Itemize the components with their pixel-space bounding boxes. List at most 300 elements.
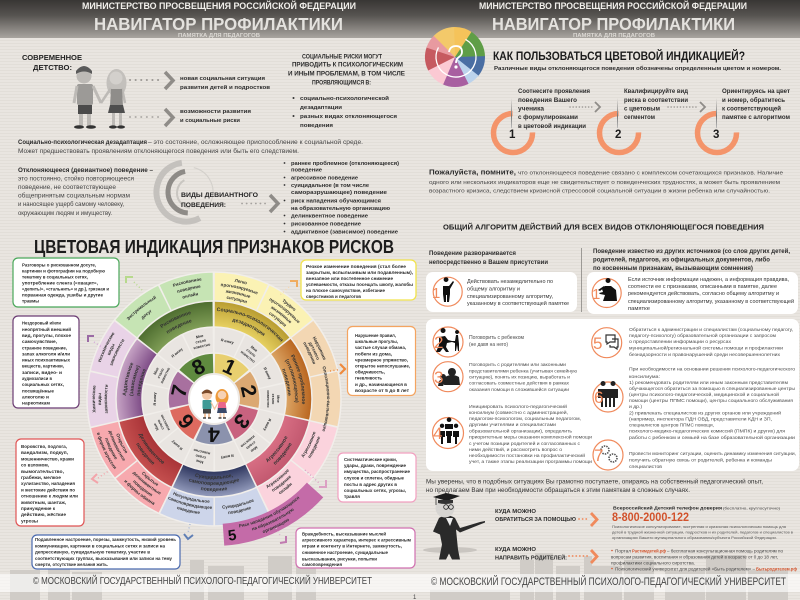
callout: pink: имущества, распространение	[344, 469, 410, 474]
text: new social situation	[180, 76, 271, 91]
text: we are confident	[426, 478, 763, 494]
arrow: step 1 to 2	[570, 102, 600, 112]
callout: blue: коммуникации, картинки в социальных сетях и записи на	[35, 544, 165, 548]
step 2: talk to child: (не давя на него)	[469, 342, 508, 348]
step 6: referrals: психолого-медико-педагогических комиссий (ПМПК) и других) для	[629, 428, 785, 434]
text: types of deviant behaviour label	[181, 192, 258, 209]
callout: magenta: высказывания, рисунки, попытки	[302, 556, 377, 562]
wheel band labels: Раннее проблемное	[290, 354, 305, 404]
wheel inner cell labels: стало	[271, 394, 275, 405]
callout: yellow: сверстников и педагогов	[306, 294, 361, 299]
text: behaviour in your presence: непосредственно в Вашем присутствии	[429, 260, 548, 266]
wheel band labels: Аддиктивное	[122, 362, 134, 396]
callout: orange: гневливость	[355, 376, 382, 381]
step 2: talk to child: Поговорить с ребенком	[469, 335, 524, 341]
card: step 1 indirect: рекомендуется действовать, согласно общему алгоритму и	[628, 290, 779, 297]
card: step 1 indirect: Если источник информации надежен, а информация правдива,	[628, 277, 789, 283]
step 5: contact specialists: 5	[593, 334, 602, 353]
wheel inner cell labels: стало	[156, 418, 165, 430]
list: types of deviant behaviour	[284, 160, 399, 236]
step 6: referrals: 2) привлекать специалистов из других органов или учреждений	[629, 410, 781, 416]
wheel numbers: 6	[174, 409, 199, 433]
heading: modern childhood: СОВРЕМЕННОЕ	[22, 53, 82, 62]
helpline: Психологическое консультирование, экстренная и кризисная психологическая помощь для	[612, 524, 786, 529]
callout: red: принуждение к	[21, 506, 56, 511]
card: step 1 indirect: специализированному алгоритму, указанному в соответствующей	[628, 298, 794, 305]
callout: red: отношению к людям или	[21, 494, 78, 499]
step 4: consilium: образовательной организации), определить	[469, 428, 572, 435]
list: types of deviant behaviour: риск нападения обучающимся	[291, 198, 381, 204]
callout: purple	[13, 316, 79, 408]
wheel band labels: Делинквентное	[138, 434, 164, 464]
text: deviant behaviour definition: окружающим людям и имуществу.	[18, 210, 112, 217]
step 3: talk to parents	[433, 362, 577, 393]
wheel band labels: самоповреждающее	[189, 478, 239, 486]
wheel behaviour band	[95, 280, 333, 518]
step 4: consilium: консилиум (совместно с администрацией,	[469, 409, 568, 416]
wheel outer labels: поведения	[132, 479, 154, 498]
wheel banner: segment 5: на образовательную	[250, 506, 296, 533]
card: step 1 indirect: 1	[592, 286, 600, 303]
step 4: consilium: учет, а также этапы реализации программы помощи	[469, 460, 592, 465]
callout: red: угрозы	[21, 518, 38, 523]
wheel band labels: Рискованное	[160, 312, 191, 328]
step 5: contact specialists: о предоставлении информации о ресурсах	[629, 339, 732, 345]
text: behaviour known from other sources	[581, 248, 790, 312]
callout: yellow: успеваемости, отказы посещать школу, жалобы	[306, 281, 413, 287]
wheel inner cell labels: Я вижу	[262, 418, 272, 432]
wheel outer labels: Агрессивное	[266, 469, 289, 488]
header band right: НАВИГАТОР ПРОФИЛАКТИКИ	[492, 14, 735, 34]
callout: magenta: играм и контенту в Интернете, замкнутость,	[302, 544, 402, 549]
wheel centre children	[202, 389, 228, 418]
wheel outer labels: виды	[97, 393, 102, 405]
callout: magenta	[296, 528, 415, 568]
callout: orange	[348, 326, 416, 396]
wheel band labels: дезадаптация	[232, 318, 265, 336]
callout: orange: побеги из дома,	[355, 350, 392, 356]
step 3: talk to parents: представителями ребенка (учитывая семейную	[469, 368, 577, 374]
callout: orange: частые случаи обмана,	[355, 344, 406, 350]
wheel outer labels: делинквентные	[131, 470, 163, 497]
text: where to seek help	[495, 509, 576, 523]
text: deviant behaviour definition: и наносящее ущерб самому человеку,	[18, 201, 124, 208]
text: disadaptation definition	[18, 139, 363, 155]
text: please remember: Пожалуйста, помните,	[429, 168, 516, 176]
wheel inner cell labels: известно	[192, 448, 211, 456]
arrow: orange	[330, 364, 345, 374]
illustration: teacher	[423, 493, 485, 560]
text: social risks heading	[288, 54, 405, 86]
arrow: to list of types	[242, 195, 278, 212]
callout: purple: странное поведение,	[22, 345, 67, 350]
callout: yellow: внезапное или постепенное снижение	[306, 276, 393, 281]
list: types of deviant behaviour: поведение	[291, 168, 322, 174]
text: opportunities and risks: и социальные риски	[180, 118, 240, 124]
wheel numbers: 8	[188, 355, 209, 380]
parent resources: профилактики социального сиротства.	[611, 560, 695, 565]
step 5: contact specialists: педагогу-психологу) образовательной организации с запросом	[629, 332, 777, 339]
text: social risks heading: ПРОЯВЛЯЮЩИМСЯ В:	[312, 80, 371, 86]
callout: purple: алкоголю и	[22, 394, 49, 400]
wheel outer labels: Рискованное	[172, 276, 203, 288]
wheel band labels: поведение	[137, 369, 146, 396]
step 6: referrals: (например, инспектора ПДН ОВД, представители КДН и ЗП,	[629, 416, 772, 422]
text: new social situation: развития детей и подростков	[180, 84, 271, 91]
wheel inner cell labels: известно	[239, 434, 256, 449]
wheel number ring	[164, 349, 264, 449]
wheel inner cell labels: Мне	[250, 445, 258, 453]
wheel inner cell labels: Я вижу	[153, 391, 157, 406]
step 7: monitoring: 7	[594, 446, 603, 465]
parent resources	[611, 548, 797, 571]
wheel inner cell labels: Я вижу	[171, 347, 184, 359]
step 6: referrals: При необходимости на основании решения психолого-педагогического	[629, 366, 795, 372]
text: we are confident: Мы уверены, что в подобных ситуациях Вы грамотно поступаете, опираясь на собственный педагогический опыт,	[426, 478, 763, 486]
step 5: contact specialists: Обратиться к администрации и специалистам (социальному педагогу,	[629, 327, 793, 333]
callout: purple: посвящённые	[22, 388, 54, 393]
text: please remember: одного или нескольких индикаторов еще не свидетельствует о поведенческих трудностях, а может быть проявлением	[429, 180, 780, 186]
step 7: monitoring: получить обратную связь от родителей, ребенка и команды	[629, 457, 773, 464]
arrow: blue	[184, 524, 193, 539]
header band right	[400, 0, 800, 39]
wheel band labels: поведение	[166, 320, 192, 334]
text: new social situation: новая социальная ситуация	[180, 76, 265, 82]
helpline: организациях Вашего муниципального образования/субъекта Российской Федерации.	[612, 535, 777, 540]
text: please remember: возрастного кризиса, следствием кризисной стрессовой социальной ситуации в жизни ребенка или случайностью.	[429, 188, 770, 194]
wheel numbers: 7	[167, 383, 192, 399]
wheel seen/known ring	[155, 340, 273, 458]
text: opportunities and risks: возможности развития	[180, 109, 251, 115]
callout: green: травмы	[22, 299, 39, 304]
callout: green: порванная одежда, ушибы и другие	[22, 292, 103, 298]
card: step 1 direct: общему алгоритму и	[467, 286, 520, 292]
wheel inner cell labels: стало	[157, 367, 165, 379]
text: opportunities and risks	[180, 109, 251, 124]
arrow: to opportunities and risks	[130, 109, 173, 126]
card: step 1 direct	[426, 272, 577, 312]
list: types of deviant behaviour: на образовательную организацию	[291, 205, 391, 212]
callout: pink: удары, драки, повреждение	[344, 463, 406, 468]
step 3: talk to parents: ситуацию), понять их позицию, выработать и	[469, 374, 570, 380]
callout: green: Разговоры о рискованном досуге,	[22, 263, 96, 268]
list: social risks: дезадаптации	[300, 105, 342, 111]
wheel outer labels: делинквентное	[107, 429, 127, 463]
callout: magenta: сниженное настроение, суицидальные	[302, 550, 388, 555]
helpline: Всероссийский Детский телефон доверия	[613, 504, 722, 512]
step 2: сегментом	[624, 115, 656, 121]
wheel numbers	[167, 355, 261, 446]
step 6: referrals: работы с ребенком и семьей на базе образовательной организации	[629, 434, 795, 441]
wheel inner cell labels: Мне	[196, 459, 204, 464]
wheel band labels: Агрессивное	[266, 436, 288, 462]
footer band: © МОСКОВСКИЙ ГОСУДАРСТВЕННЫЙ ПСИХОЛОГО-ПЕДАГОГИЧЕСКИЙ УНИВЕРСИТЕТ	[33, 574, 372, 587]
step 1	[494, 89, 590, 152]
text: types of deviant behaviour label: ВИДЫ ДЕВИАНТНОГО	[181, 192, 258, 199]
callout: red: грабежи, мелкое	[21, 474, 61, 480]
wheel numbers: 4	[208, 422, 220, 446]
wheel outer labels: Несуицидальное	[173, 492, 210, 503]
text: behaviour in your presence	[429, 251, 548, 266]
parent resources: Психологический университет для родителей «Быть родителем» –	[615, 566, 756, 571]
wheel outer labels: поведение	[177, 506, 200, 514]
text: deviant behaviour definition	[18, 168, 154, 217]
list: social risks	[292, 95, 397, 129]
callout: magenta: Враждебность, высказывание мыслей	[302, 530, 386, 536]
callout: green: «депить!», «стальнить» и др.), грязная и	[22, 287, 109, 292]
callout: pink: слухов и сплетен, обидные	[344, 474, 404, 480]
text: we are confident: но предлагаем Вам при необходимости обращаться к этим памяткам в сложных случаях.	[426, 486, 690, 494]
callout: purple: вид, прогулы, плохое	[22, 333, 71, 338]
callout: red	[16, 439, 84, 526]
step 2	[600, 88, 688, 152]
list: types of deviant behaviour: суицидальное (в том числе	[291, 183, 369, 189]
card: steps 2-7	[426, 319, 799, 471]
illustration: grey children	[74, 66, 126, 129]
card: step 1 direct: Действовать незамедлительно по	[467, 278, 553, 285]
step 4: consilium: Инициировать психолого-педагогический	[469, 403, 567, 410]
callout: pink: социальных сетях, угрозы,	[344, 488, 406, 493]
wheel banner: segment 5	[222, 482, 324, 546]
text: where to refer parents: КУДА МОЖНО	[495, 547, 536, 553]
callout: blue	[32, 535, 180, 569]
callout: red: мошенничество, кражи	[21, 456, 74, 461]
callout: orange: обидчивость,	[355, 369, 385, 375]
text: social risks heading: ПРИВОДИТЬ К ПСИХОЛОГИЧЕСКИМ	[292, 62, 403, 68]
icon: concentric arcs	[146, 152, 226, 232]
parent resources: Растимдетей.рф	[632, 548, 666, 553]
wheel outer labels: онлайн	[279, 482, 292, 494]
step 6: referrals: специалистов центров ППМС помощи,	[629, 422, 714, 428]
wheel outer labels: жизненные	[270, 306, 292, 324]
wheel outer labels: зависимости	[103, 384, 109, 414]
callout: orange: открытое непослушание,	[355, 364, 410, 368]
step 1: поведения Вашего	[518, 98, 577, 104]
wheel outer labels: Нехимические	[96, 330, 116, 363]
header band left	[0, 0, 400, 39]
heading: modern childhood	[22, 53, 82, 72]
callout: purple: иных психоактивных	[22, 358, 70, 363]
icon: colour wheel with question mark	[429, 30, 483, 84]
wheel outer labels: детского	[308, 342, 319, 360]
arrow: step 2 to 3	[668, 102, 705, 112]
text: please remember: что отклоняющееся поведение связано с комплексом сочетающихся признаков. Наличие	[518, 170, 784, 176]
subheading: Различные виды отклоняющегося поведения обозначены определенным цветом и номером.	[494, 65, 781, 72]
wheel inner cell labels: Я вижу	[220, 338, 235, 345]
callout: yellow: Резкое изменение поведения (стал более	[306, 263, 406, 269]
wheel inner cell labels: Мне	[153, 367, 160, 376]
wheel outer labels: поведение	[228, 506, 251, 514]
callout: pink: травля	[344, 494, 360, 499]
wheel outer labels: прогнозируемые	[269, 298, 300, 324]
callout: pink: посты в адрес других в	[344, 482, 397, 487]
step 6: referrals: (центры психолого-педагогической, медицинской и социальной	[629, 391, 779, 398]
wheel inner cell labels: Я вижу	[262, 367, 272, 381]
callout: purple: самочувствие,	[22, 339, 57, 344]
wheel inner cell labels: Мне	[196, 334, 204, 339]
callout: red: действию, жёсткие	[21, 511, 66, 517]
wheel outer labels: поведение	[103, 437, 119, 461]
wheel band labels: (отклоняющееся)	[284, 359, 299, 402]
card: step 1 direct: указанному в соответствующей памятке	[467, 300, 569, 307]
text: behaviour known from other sources: родителей, педагогов, из официальных документов, либо	[593, 256, 770, 264]
callout: orange: Нарушение правил,	[355, 333, 396, 338]
step 3: talk to parents: согласовать совместные действия в рамках	[469, 380, 570, 386]
footer band	[0, 574, 800, 592]
wheel inner cell labels: Мне	[276, 395, 280, 403]
list: social risks: разных видах отклоняющегося	[300, 114, 397, 120]
text: behaviour known from other sources: по косвенным признакам, вызывающим сомнения)	[593, 266, 753, 272]
text: where to seek help: ОБРАТИТЬСЯ ЗА ПОМОЩЬЮ	[495, 517, 576, 523]
arrow: yellow-orange	[280, 281, 297, 295]
card: step 1 direct: 1	[432, 285, 440, 302]
wheel outer labels: в форме агрессии	[94, 431, 118, 471]
wheel outer labels: Химические	[91, 385, 97, 413]
wheel band labels	[122, 308, 305, 492]
arrow: green	[126, 277, 142, 290]
step 5: contact specialists: муниципальной/региональной системы помощи и профилактики	[629, 344, 783, 352]
colour wheel	[86, 271, 342, 546]
step 6: referrals	[593, 366, 795, 441]
text: disadaptation definition: – это состояние, осложняющее приспособление к социальной среде.	[148, 139, 363, 146]
step 3: Ориентируясь на цвет	[722, 89, 790, 95]
wheel band labels: поведение	[200, 487, 228, 492]
callout: blue: Подавленное настроение, порезы, замкнутость, низкий уровень	[35, 536, 176, 542]
wheel outer labels: ситуации	[226, 296, 247, 304]
step 3: к соответствующей	[722, 106, 781, 112]
step 4: consilium	[432, 403, 592, 465]
callout: green: тематику в социальных сетях,	[22, 275, 88, 280]
wheel outer ring	[56, 241, 372, 557]
arrow: purple	[88, 336, 103, 348]
callout: purple: Нездоровый и/или	[22, 320, 61, 326]
wheel outer labels: поведение	[176, 283, 202, 294]
step 5: contact specialists: безнадзорности и правонарушений среди несовершеннолетних	[629, 351, 781, 358]
wheel inner cell labels: известно	[193, 342, 211, 350]
wheel inner cell labels: стало	[245, 440, 256, 450]
callout: green: употребление сленга («хвацит»,	[22, 280, 98, 286]
wheel band labels: поведение	[136, 442, 154, 464]
step 1: в цветовой индикации	[518, 123, 586, 130]
wheel numbers: 2	[236, 383, 261, 399]
list: types of deviant behaviour: саморазрушающее) поведение	[291, 190, 387, 196]
callout: blue: соответствующих группах, высказывания или записи на тему	[35, 556, 172, 561]
text: please remember	[429, 168, 784, 194]
step 4: consilium: ними действий, и рассмотреть вопрос о	[469, 446, 562, 453]
wheel inner cell labels: известно	[160, 413, 171, 431]
text: behaviour in your presence: Поведение разворачивается	[429, 251, 516, 257]
callout: purple: неопрятный внешний	[22, 326, 71, 332]
step 2: talk to child: 2	[434, 333, 443, 352]
wheel outer labels: и формы обмана	[122, 478, 157, 507]
step 6: referrals: 6	[594, 388, 603, 407]
wheel inner cell labels: стало	[195, 338, 207, 345]
card: step 1 direct: специализированному алгоритму,	[467, 294, 553, 300]
header band right: ПАМЯТКА ДЛЯ ПЕДАГОГОВ	[573, 33, 655, 39]
callout: purple: запах алкоголя и/или	[22, 351, 70, 356]
wheel inner cell labels: стало	[194, 453, 207, 460]
step 1: 1	[509, 129, 516, 141]
list: types of deviant behaviour: делинквентное поведение	[291, 214, 368, 220]
wheel inner cell labels: известно	[240, 350, 256, 364]
step 4: consilium: другими учителями и специалистами	[469, 423, 556, 428]
callout: red: Воровство, подлога,	[21, 444, 67, 449]
text: deviant behaviour definition: общепринятым социальным нормам	[18, 192, 130, 200]
callout: red: вымогательство,	[21, 469, 64, 474]
card: step 1 indirect: памятке	[628, 306, 650, 312]
step 7: monitoring	[593, 440, 796, 470]
wheel outer labels: Легко	[234, 278, 247, 284]
step 3: памятке с алгоритмом	[722, 115, 791, 121]
wheel outer labels: Суицидальное	[222, 500, 254, 510]
wheel outer labels: поведение	[308, 436, 320, 458]
wheel numbers: 3	[229, 409, 254, 433]
text: deviant behaviour definition: это постоянно, стойко повторяющееся	[18, 176, 134, 182]
heading: general algorithm: ОБЩИЙ АЛГОРИТМ ДЕЙСТВИЙ ДЛЯ ВСЕХ ВИДОВ ОТКЛОНЯЮЩЕГОСЯ ПОВЕДЕНИЯ	[443, 222, 764, 232]
wheel outer labels: досуг	[140, 308, 153, 320]
step 2: 2	[615, 129, 621, 141]
parent resources: Бытьродителем.рф	[756, 566, 797, 571]
text: social risks heading: СОЦИАЛЬНЫЕ РИСКИ МОГУТ	[302, 54, 382, 60]
wheel outer labels: зависимости	[108, 337, 126, 367]
callout: red: и жестокие действия по	[21, 486, 75, 492]
callout: magenta: агрессивного характера, интерес к агрессивным	[302, 538, 412, 543]
wheel outer labels	[92, 278, 330, 514]
heading: how to use the colour indication: КАК ПОЛЬЗОВАТЬСЯ ЦВЕТОВОЙ ИНДИКАЦИЕЙ?	[493, 50, 745, 63]
step 7: monitoring: Провести мониторинг ситуации, оценить динамику изменения ситуации,	[629, 451, 796, 457]
wheel outer labels: Нарушения	[312, 336, 326, 360]
text: deviant behaviour definition: поведение, не соответствующее	[18, 184, 117, 191]
callout: blue: смерти, отсутствие желания жить.	[35, 562, 108, 567]
callout: green: картинки и фотографии на подобную	[22, 268, 105, 274]
step 4: consilium: педагогом-психологом, социальным педагогом,	[469, 417, 581, 422]
list: types of deviant behaviour: рискованное поведение	[291, 222, 361, 228]
wheel banner: segment 5: организацию	[261, 517, 291, 535]
wheel outer labels: Трудно	[282, 298, 296, 311]
callout: orange: и др., начинающиеся в	[355, 382, 407, 387]
wheel outer labels: Оппозиционно-вызывающее	[322, 366, 330, 432]
arrow: magenta	[276, 528, 286, 543]
card: step 1 indirect	[587, 272, 798, 314]
wheel inner cell labels: стало	[245, 348, 257, 358]
header band left: ПАМЯТКА ДЛЯ ПЕДАГОГОВ	[178, 33, 260, 39]
callout: yellow	[301, 260, 416, 300]
list: types of deviant behaviour: раннее проблемное (отклоняющееся)	[291, 160, 399, 167]
callout: purple: аудиозаписи в	[22, 376, 52, 381]
card: step 1 indirect: соотнести ее с признаками, описанными в памятке, далее	[628, 284, 777, 290]
text: disadaptation definition: Может предшествовать проявлениям отклоняющегося поведения или быть его следствием.	[18, 148, 299, 155]
wheel inner cell labels: Мне	[250, 345, 258, 353]
wheel outer labels: прогнозируемые	[220, 284, 258, 294]
wheel outer labels: ситуации	[269, 312, 286, 327]
helpline: 8-800-2000-122	[612, 510, 689, 524]
step 7: monitoring: специалистов	[629, 465, 662, 470]
header band right: МИНИСТЕРСТВО ПРОСВЕЩЕНИЯ РОССИЙСКОЙ ФЕДЕРАЦИИ	[479, 0, 747, 11]
list: social risks: поведения	[300, 123, 333, 129]
wheel inner cell labels: Я вижу	[220, 453, 234, 460]
wheel inner cell labels: известно	[266, 390, 270, 408]
text: social risks heading: И ИНЫМ ПРОБЛЕМАМ, В ТОМ ЧИСЛЕ	[288, 72, 405, 78]
callout: yellow: на плохое самочувствие, избегание	[306, 287, 385, 293]
callout: magenta: самоповреждения	[302, 562, 342, 567]
step 3: 3	[713, 129, 719, 141]
step 1: ученика	[518, 106, 545, 112]
step 6: referrals: помощи (центры ППМС помощи), центры социального обслуживания	[629, 398, 793, 404]
wheel inner cell labels: Я вижу	[170, 439, 184, 451]
callout: orange: возрасте от 5 до 8 лет	[355, 388, 410, 393]
callout: red: со взломом,	[21, 463, 49, 468]
wheel inner cell labels: известно	[160, 366, 171, 384]
